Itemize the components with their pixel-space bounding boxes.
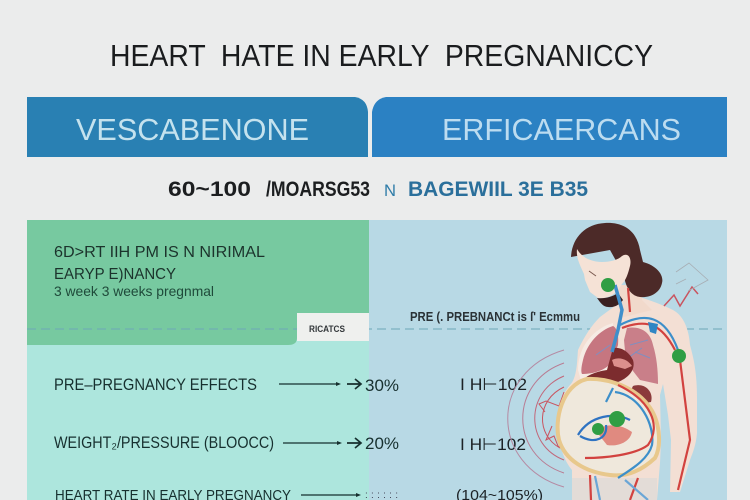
panel: upper green (27, 220, 369, 345)
panel: left header: VESCABENONE (76, 112, 309, 147)
title: HEART HATE IN EARLY PREGNANICCY (110, 38, 653, 73)
shoulder pulse (664, 287, 698, 306)
neck (612, 285, 652, 318)
row: weight pressure: WEIGHT₂/PRESSURE (BLOOCC) (54, 434, 274, 452)
value 2: I H⊢102 (460, 435, 526, 454)
lung bronchi (596, 340, 650, 360)
green panel subheading: EARYP E)NANCY (54, 266, 176, 283)
heart and liver (578, 348, 634, 386)
row: pre-pregnancy effects: PRE–PREGNANCY EFFECTS (54, 376, 257, 394)
pulse zigzags (539, 392, 566, 452)
green markers (592, 278, 686, 435)
hair (571, 223, 662, 297)
womb (558, 379, 659, 475)
torso, arm and legs (558, 297, 697, 500)
leg shading (572, 478, 657, 500)
blood vessels (578, 285, 690, 500)
row: pre-pregnancy effects: 30% (365, 376, 399, 395)
panel: right header (372, 97, 727, 157)
inner arm gap (661, 385, 670, 470)
pulse rings (508, 350, 564, 487)
subtitle range: N (384, 181, 396, 200)
dashed divider (27, 328, 727, 330)
row: weight pressure (54, 434, 399, 453)
subtitle range (168, 178, 588, 201)
faint chart lines (676, 263, 708, 291)
white tag (297, 313, 369, 341)
row: pre-pregnancy effects (54, 376, 399, 395)
panel: right blue background (369, 220, 727, 500)
lungs (581, 326, 618, 374)
row: weight pressure: 20% (365, 434, 399, 453)
subtitle range: 60~100 (168, 178, 251, 201)
panel: right header: ERFICAERCANS (442, 112, 681, 147)
green panel note: 3 week 3 weeks pregnmal (54, 283, 214, 299)
illustration: pregnant woman anatomy (508, 223, 708, 500)
placenta organ (595, 425, 632, 445)
lung outline (578, 323, 613, 384)
white tag: RICATCS (309, 324, 345, 334)
right column label: PRE (. PREBNANCt is ſ' Ecmmu (410, 309, 580, 324)
eye (589, 271, 596, 276)
panel: left header (27, 97, 368, 157)
green panel heading: 6D>RT IIH PM IS N NIRIMAL (54, 244, 265, 261)
value 1: I H⊢102 (460, 375, 527, 394)
hair under chin (597, 293, 623, 307)
blue node (648, 322, 658, 334)
subtitle range: BAGEWIIL 3E B35 (408, 178, 588, 201)
subtitle range: /MOARSG53 (266, 178, 370, 201)
face (577, 249, 631, 298)
panel: lower mint (27, 338, 369, 500)
